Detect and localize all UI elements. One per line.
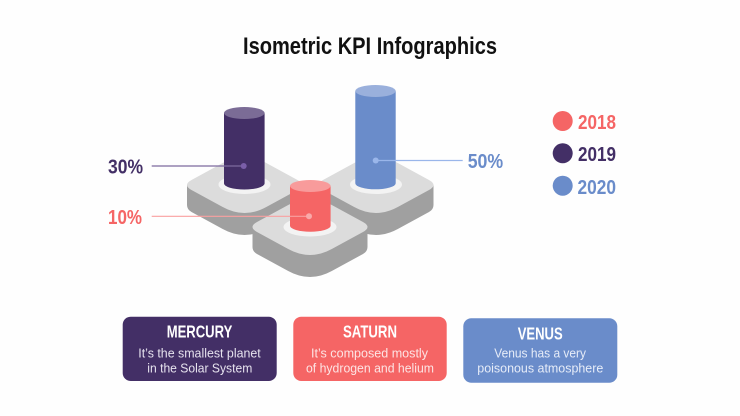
panel: Saturn: SATURN <box>343 322 397 342</box>
callout: 30% <box>108 156 247 178</box>
panel: Mercury <box>123 317 277 381</box>
panel: Venus: poisonous atmosphere <box>477 361 603 376</box>
panel: Saturn: of hydrogen and helium <box>306 361 434 376</box>
legend item: 2019: 2019 <box>578 144 616 166</box>
panel: Saturn <box>293 317 447 381</box>
callout: 10%: 10% <box>108 207 142 229</box>
title: Isometric KPI Infographics <box>243 33 497 60</box>
callout: 10% <box>108 207 312 229</box>
panel: Mercury: in the Solar System <box>147 361 252 376</box>
callout: 50% <box>373 151 503 173</box>
panel: Venus <box>463 318 617 383</box>
panel: Mercury: It’s the smallest planet <box>138 346 261 361</box>
isometric chart <box>187 85 434 277</box>
panel: Saturn: It’s composed mostly <box>311 346 428 361</box>
callout: 30%: 30% <box>108 156 143 178</box>
legend item: 2020: 2020 <box>578 177 616 199</box>
cylinder: 2020 blue <box>355 85 396 189</box>
legend <box>553 111 616 199</box>
panel: Venus: Venus has a very <box>494 346 586 361</box>
legend item: 2018: 2018 <box>578 112 616 134</box>
panel: Mercury: MERCURY <box>167 322 233 342</box>
cylinder: 2019 purple <box>224 107 265 190</box>
platform: 2020 <box>318 157 434 235</box>
panel: Venus: VENUS <box>518 323 563 343</box>
platform: 2019 <box>187 157 302 235</box>
cylinder: 2018 red <box>290 180 331 232</box>
callout: 50%: 50% <box>468 151 503 173</box>
platform: 2018 <box>252 199 368 277</box>
